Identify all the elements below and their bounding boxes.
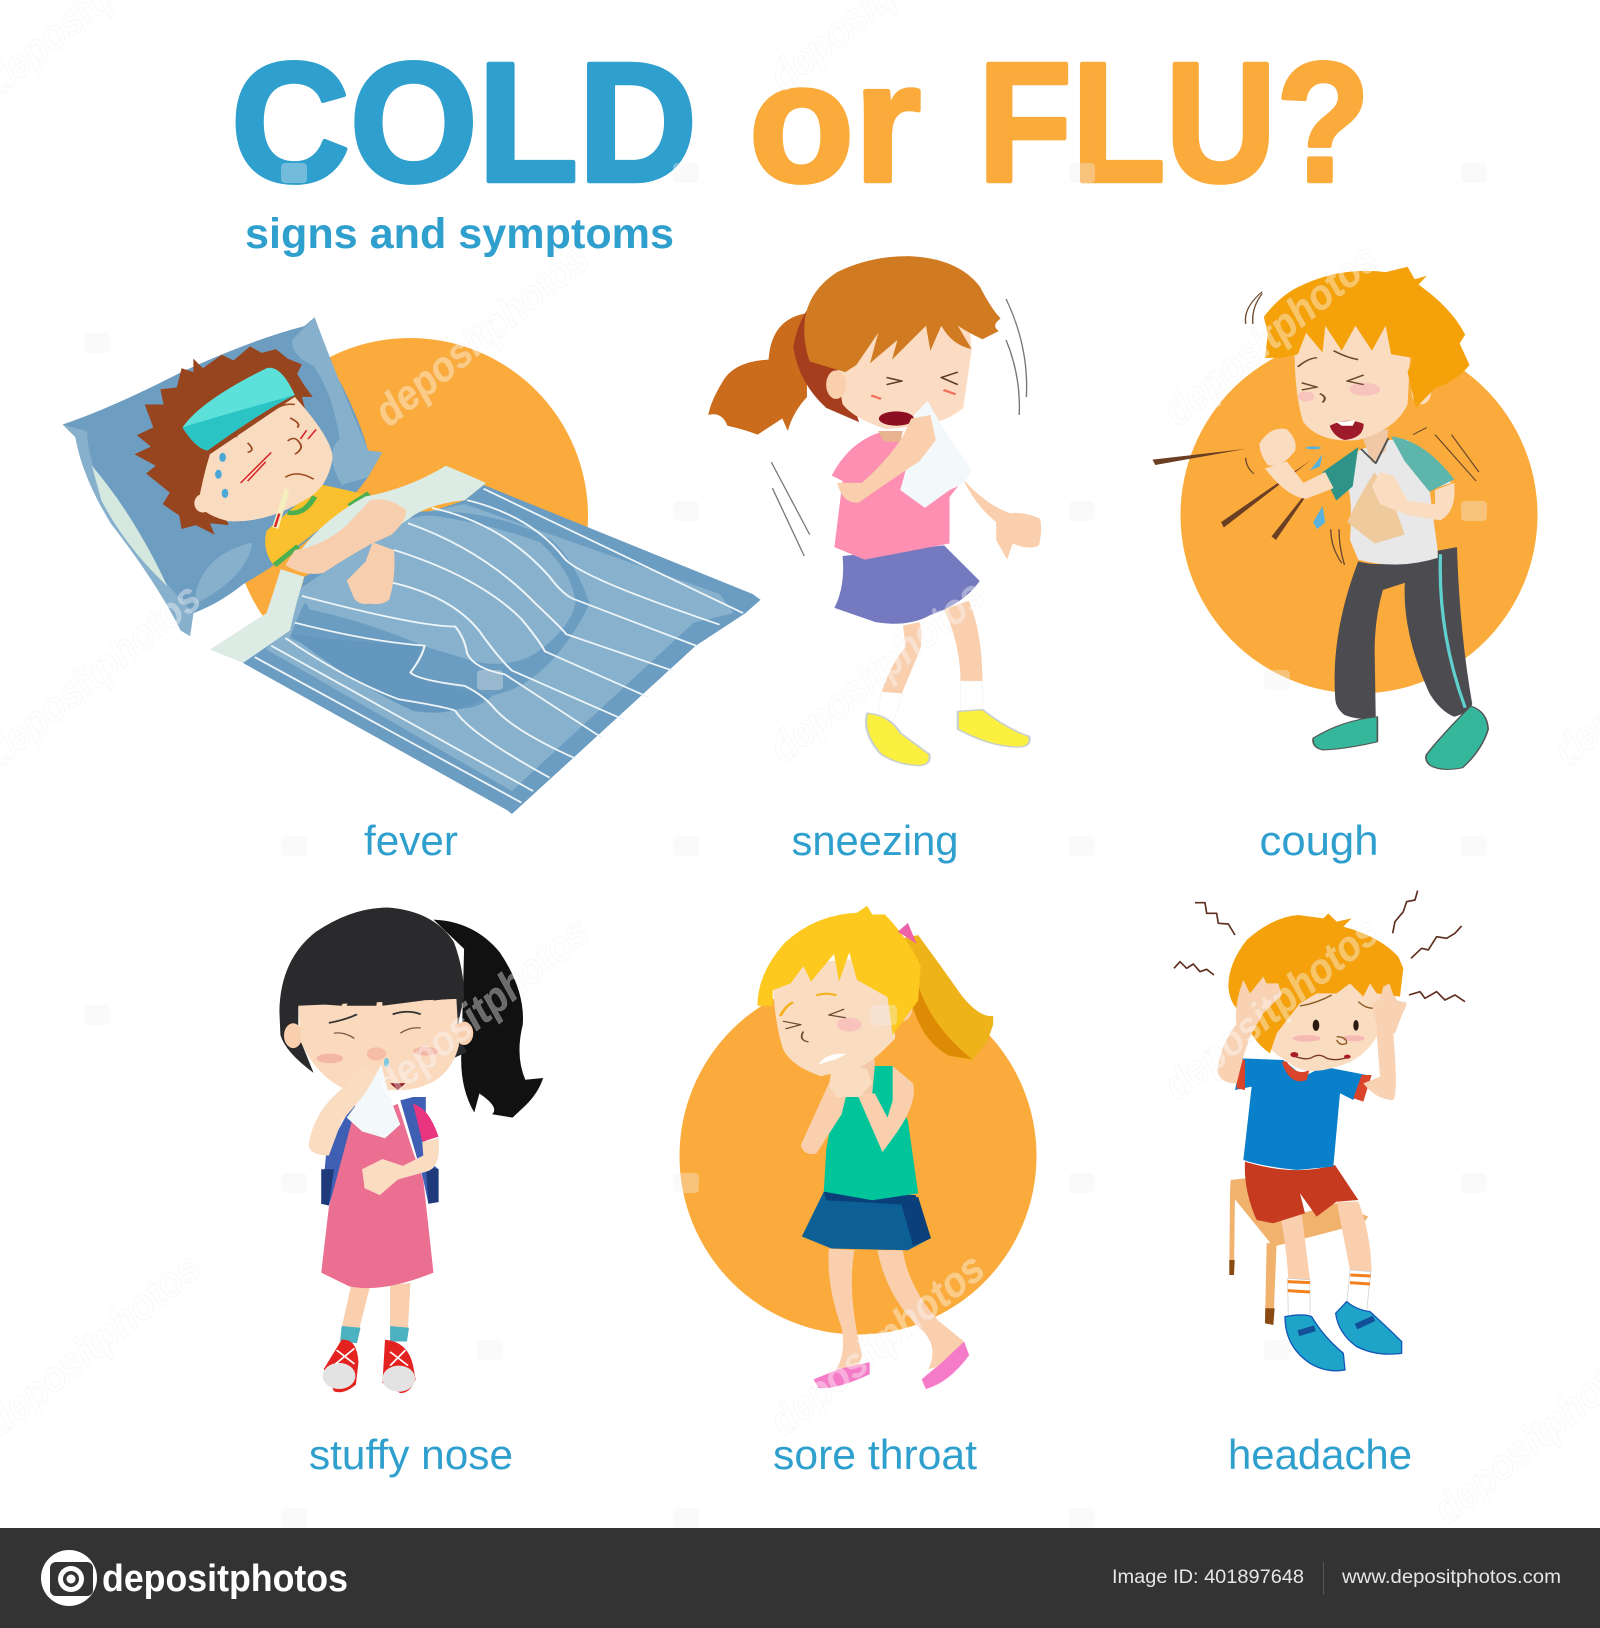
- socks: [878, 681, 982, 719]
- skirt: [834, 545, 980, 624]
- arms: [1259, 429, 1334, 499]
- panel: headache: [1174, 891, 1465, 1478]
- illustration: girl with stuffy nose: [279, 908, 543, 1393]
- watermark layer: depositphotos: [1154, 234, 1387, 435]
- pain zigzags: [1174, 891, 1465, 1002]
- right arm: [963, 479, 1041, 560]
- panel: sneezing: [708, 256, 1041, 864]
- right hand on head: [1372, 983, 1407, 1033]
- pillow: [63, 317, 382, 636]
- watermark layer: depositphotos: [365, 234, 598, 435]
- shoes: [1285, 1302, 1402, 1371]
- title: COLD or FLU?: [231, 28, 1370, 218]
- hair back: [793, 279, 859, 422]
- handkerchief: [1347, 472, 1405, 544]
- panel: stuffy nose: [279, 908, 543, 1478]
- droplets: [1306, 446, 1325, 529]
- socks: [1288, 1270, 1371, 1320]
- ponytail: [708, 313, 807, 435]
- hand and arm: [308, 1066, 382, 1156]
- label: headache: headache: [1228, 1431, 1412, 1478]
- stool: [1229, 1178, 1368, 1325]
- footer bar: [0, 1528, 1600, 1628]
- motion lines: [1245, 292, 1479, 565]
- shorts: [1245, 1162, 1358, 1223]
- panel: cough: [1153, 267, 1538, 864]
- title: COLD or FLU?: COLD: [231, 28, 697, 218]
- arms: [1218, 983, 1407, 1100]
- left arm: [837, 415, 936, 503]
- head: [804, 256, 1001, 442]
- arms and hands: [801, 1066, 914, 1154]
- skirt: [802, 1192, 931, 1250]
- label: stuffy nose: stuffy nose: [309, 1431, 513, 1478]
- panel: sore throat: [680, 906, 1036, 1478]
- ponytail: [433, 920, 543, 1118]
- illustration: sick child in bed: [63, 317, 761, 814]
- head: [279, 908, 473, 1090]
- child: [134, 346, 369, 565]
- subtitle: signs and symptoms: [245, 210, 674, 258]
- ponytail: [900, 935, 993, 1061]
- watermark layer: depositphotos: [760, 571, 993, 772]
- blanket: [243, 485, 761, 814]
- label: sore throat: sore throat: [773, 1431, 977, 1478]
- top: [824, 1066, 918, 1200]
- legs: [881, 601, 982, 697]
- title: COLD or FLU?: or: [749, 28, 921, 218]
- right arm and hand: [1372, 472, 1455, 520]
- motion lines: [771, 299, 1027, 556]
- illustration: girl with sore throat: [757, 906, 993, 1389]
- illustration: coughing boy: [1153, 267, 1488, 769]
- hands at throat: [829, 1063, 872, 1097]
- tissue: [347, 1064, 400, 1138]
- slippers: [814, 1341, 969, 1389]
- head: [1228, 913, 1403, 1071]
- socks: [340, 1326, 409, 1343]
- title: COLD or FLU?: FLU?: [978, 28, 1370, 218]
- t-shirt: [1323, 429, 1454, 565]
- orange circle: [232, 338, 588, 694]
- label: cough: cough: [1260, 817, 1378, 864]
- left hand on head: [1236, 977, 1282, 1037]
- watermark layer: depositphotos: [760, 1244, 993, 1445]
- label: fever: fever: [364, 817, 458, 864]
- watermark layer: depositphotos: [1154, 908, 1387, 1109]
- orange circle: [1180, 336, 1538, 694]
- website: www.depositphotos.com: [1341, 1567, 1561, 1588]
- legs: [342, 1283, 411, 1328]
- shoes: [1313, 706, 1488, 769]
- t-shirt: [1235, 1058, 1372, 1170]
- brand name: depositphotos: [102, 1558, 348, 1600]
- head: [757, 906, 921, 1076]
- arm across body: [362, 1138, 439, 1195]
- shoes: [866, 710, 1030, 766]
- backpack: [321, 1097, 439, 1205]
- illustration: boy with headache on stool: [1174, 891, 1465, 1371]
- label: sneezing: sneezing: [792, 817, 958, 864]
- legs: [829, 1249, 964, 1372]
- neck: [837, 1059, 875, 1095]
- image id: Image ID: 401897648: [1112, 1567, 1304, 1588]
- shirt: [832, 433, 963, 560]
- tissue: [900, 401, 972, 508]
- head: [1264, 267, 1470, 440]
- sheet fold and arms: [210, 466, 486, 663]
- illustration: sneezing girl: [708, 256, 1041, 766]
- orange circle: [680, 978, 1036, 1334]
- legs: [1280, 1202, 1372, 1317]
- cough streaks: [1153, 449, 1323, 540]
- sneakers: [323, 1340, 416, 1393]
- icon: depositphotos camera logo: [41, 1550, 97, 1606]
- watermark layer: depositphotos: [365, 908, 598, 1109]
- trousers: [1335, 547, 1472, 719]
- dress: [321, 1104, 433, 1288]
- panel: fever: [63, 317, 761, 864]
